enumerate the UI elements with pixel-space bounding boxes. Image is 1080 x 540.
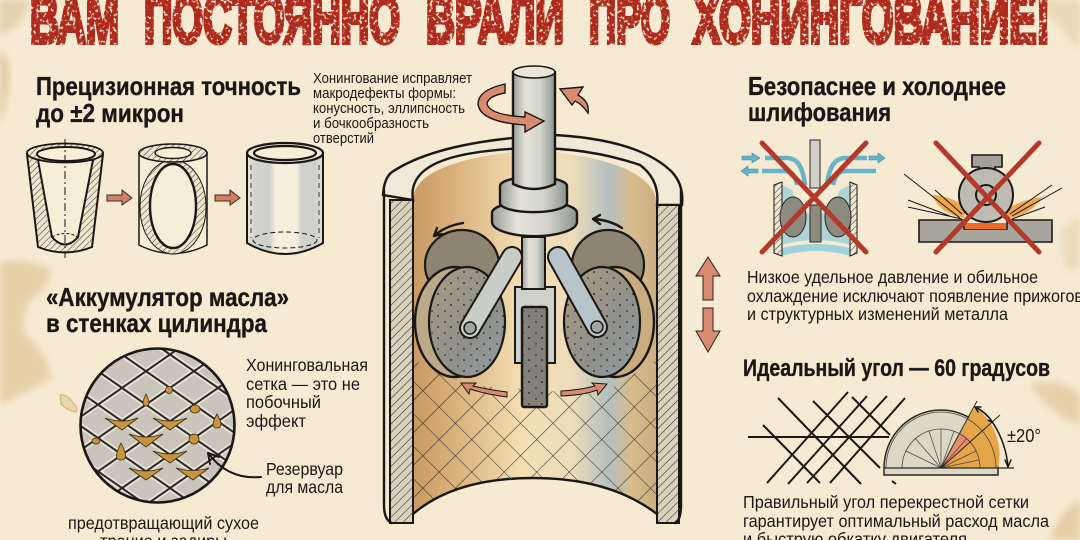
- text: mesh note: сетка — это не: [246, 374, 360, 394]
- oil reservoirs: [92, 386, 221, 480]
- heading: precision: до ±2 микрон: [36, 98, 184, 128]
- heading: safer: шлифования: [748, 97, 891, 127]
- heading: oil accumulator: в стенках цилиндра: [46, 308, 267, 338]
- text: right angle: [743, 492, 1049, 540]
- label: plus-minus twenty degrees: ±20°: [1007, 426, 1041, 446]
- red cross 2: [936, 143, 1039, 252]
- upper collar: [500, 177, 567, 212]
- heading: precision: [36, 71, 301, 128]
- rotation arrow: [478, 84, 544, 132]
- text: right angle: Правильный угол перекрестной сетки: [743, 492, 1029, 512]
- callout: oil reservoir: для масла: [266, 477, 343, 497]
- diagram: crosshatch lines: [748, 392, 905, 484]
- cross-hatch on wall: [414, 362, 656, 500]
- text: mesh note: побочный: [246, 392, 321, 412]
- icon: tapered bore: [27, 139, 103, 258]
- text: dry friction: [68, 513, 259, 540]
- diagram: protractor: [884, 401, 1014, 475]
- icon: corrected bore: [247, 143, 323, 254]
- lower collar: [492, 201, 577, 236]
- cylinder rim: [383, 135, 682, 205]
- heading: safer: [748, 71, 1006, 127]
- front wheels: [415, 267, 495, 377]
- icon: elliptical bore: [139, 144, 207, 254]
- heading: oil accumulator: «Аккумулятор масла»: [46, 282, 289, 312]
- text: low pressure: [747, 267, 1080, 324]
- cylinder interior: [413, 150, 657, 514]
- text: macro defects: конусность, эллипсность: [313, 100, 465, 117]
- text: mesh note: Хонинговальная: [246, 355, 368, 375]
- icon: stain blot: [60, 395, 77, 412]
- arrow: reciprocating up: [696, 257, 720, 300]
- heading: oil accumulator: [46, 282, 289, 338]
- text: right angle: гарантирует оптимальный расход масла: [743, 511, 1049, 531]
- text: macro defects: Хонингование исправляет: [313, 70, 472, 87]
- centre holder and wheel: [515, 287, 555, 363]
- text: macro defects: макродефекты формы:: [313, 85, 456, 102]
- main illustration: cylinder with honing head: [383, 66, 682, 523]
- text: dry friction: предотвращающий сухое: [68, 513, 259, 533]
- heading: safer: Безопаснее и холоднее: [748, 71, 1006, 101]
- back wheels: [425, 230, 499, 300]
- text: mesh note: [246, 355, 368, 431]
- title: [30, 0, 1050, 58]
- text: low pressure: Низкое удельное давление и обильное: [747, 267, 1038, 287]
- diagram: honing mesh magnified: [80, 345, 240, 505]
- dark arrows inside: [434, 223, 463, 236]
- callout: oil reservoir: [208, 453, 343, 497]
- text: mesh note: эффект: [246, 411, 306, 431]
- cylinder walls: [390, 200, 413, 523]
- icon: grinding with sparks crossed out: [904, 155, 1062, 242]
- arrow: reciprocating down: [696, 308, 720, 352]
- red cross 1: [762, 143, 866, 252]
- shaft: [513, 69, 555, 189]
- text: macro defects: отверстий: [313, 130, 374, 147]
- icon: honing with coolant crossed out: [741, 140, 885, 256]
- arms: [470, 257, 512, 328]
- arrow: tapered to oval: [107, 190, 132, 205]
- text: macro defects: и бочкообразность: [313, 115, 429, 132]
- bottom arrows: [461, 383, 507, 397]
- text: macro defects: [313, 70, 472, 147]
- heading: precision: Прецизионная точность: [36, 71, 301, 101]
- callout: oil reservoir: Резервуар: [266, 459, 343, 479]
- rotation arrow right: [560, 87, 588, 113]
- text: low pressure: и структурных изменений металла: [747, 304, 1008, 324]
- arrow: oval to straight: [215, 190, 240, 205]
